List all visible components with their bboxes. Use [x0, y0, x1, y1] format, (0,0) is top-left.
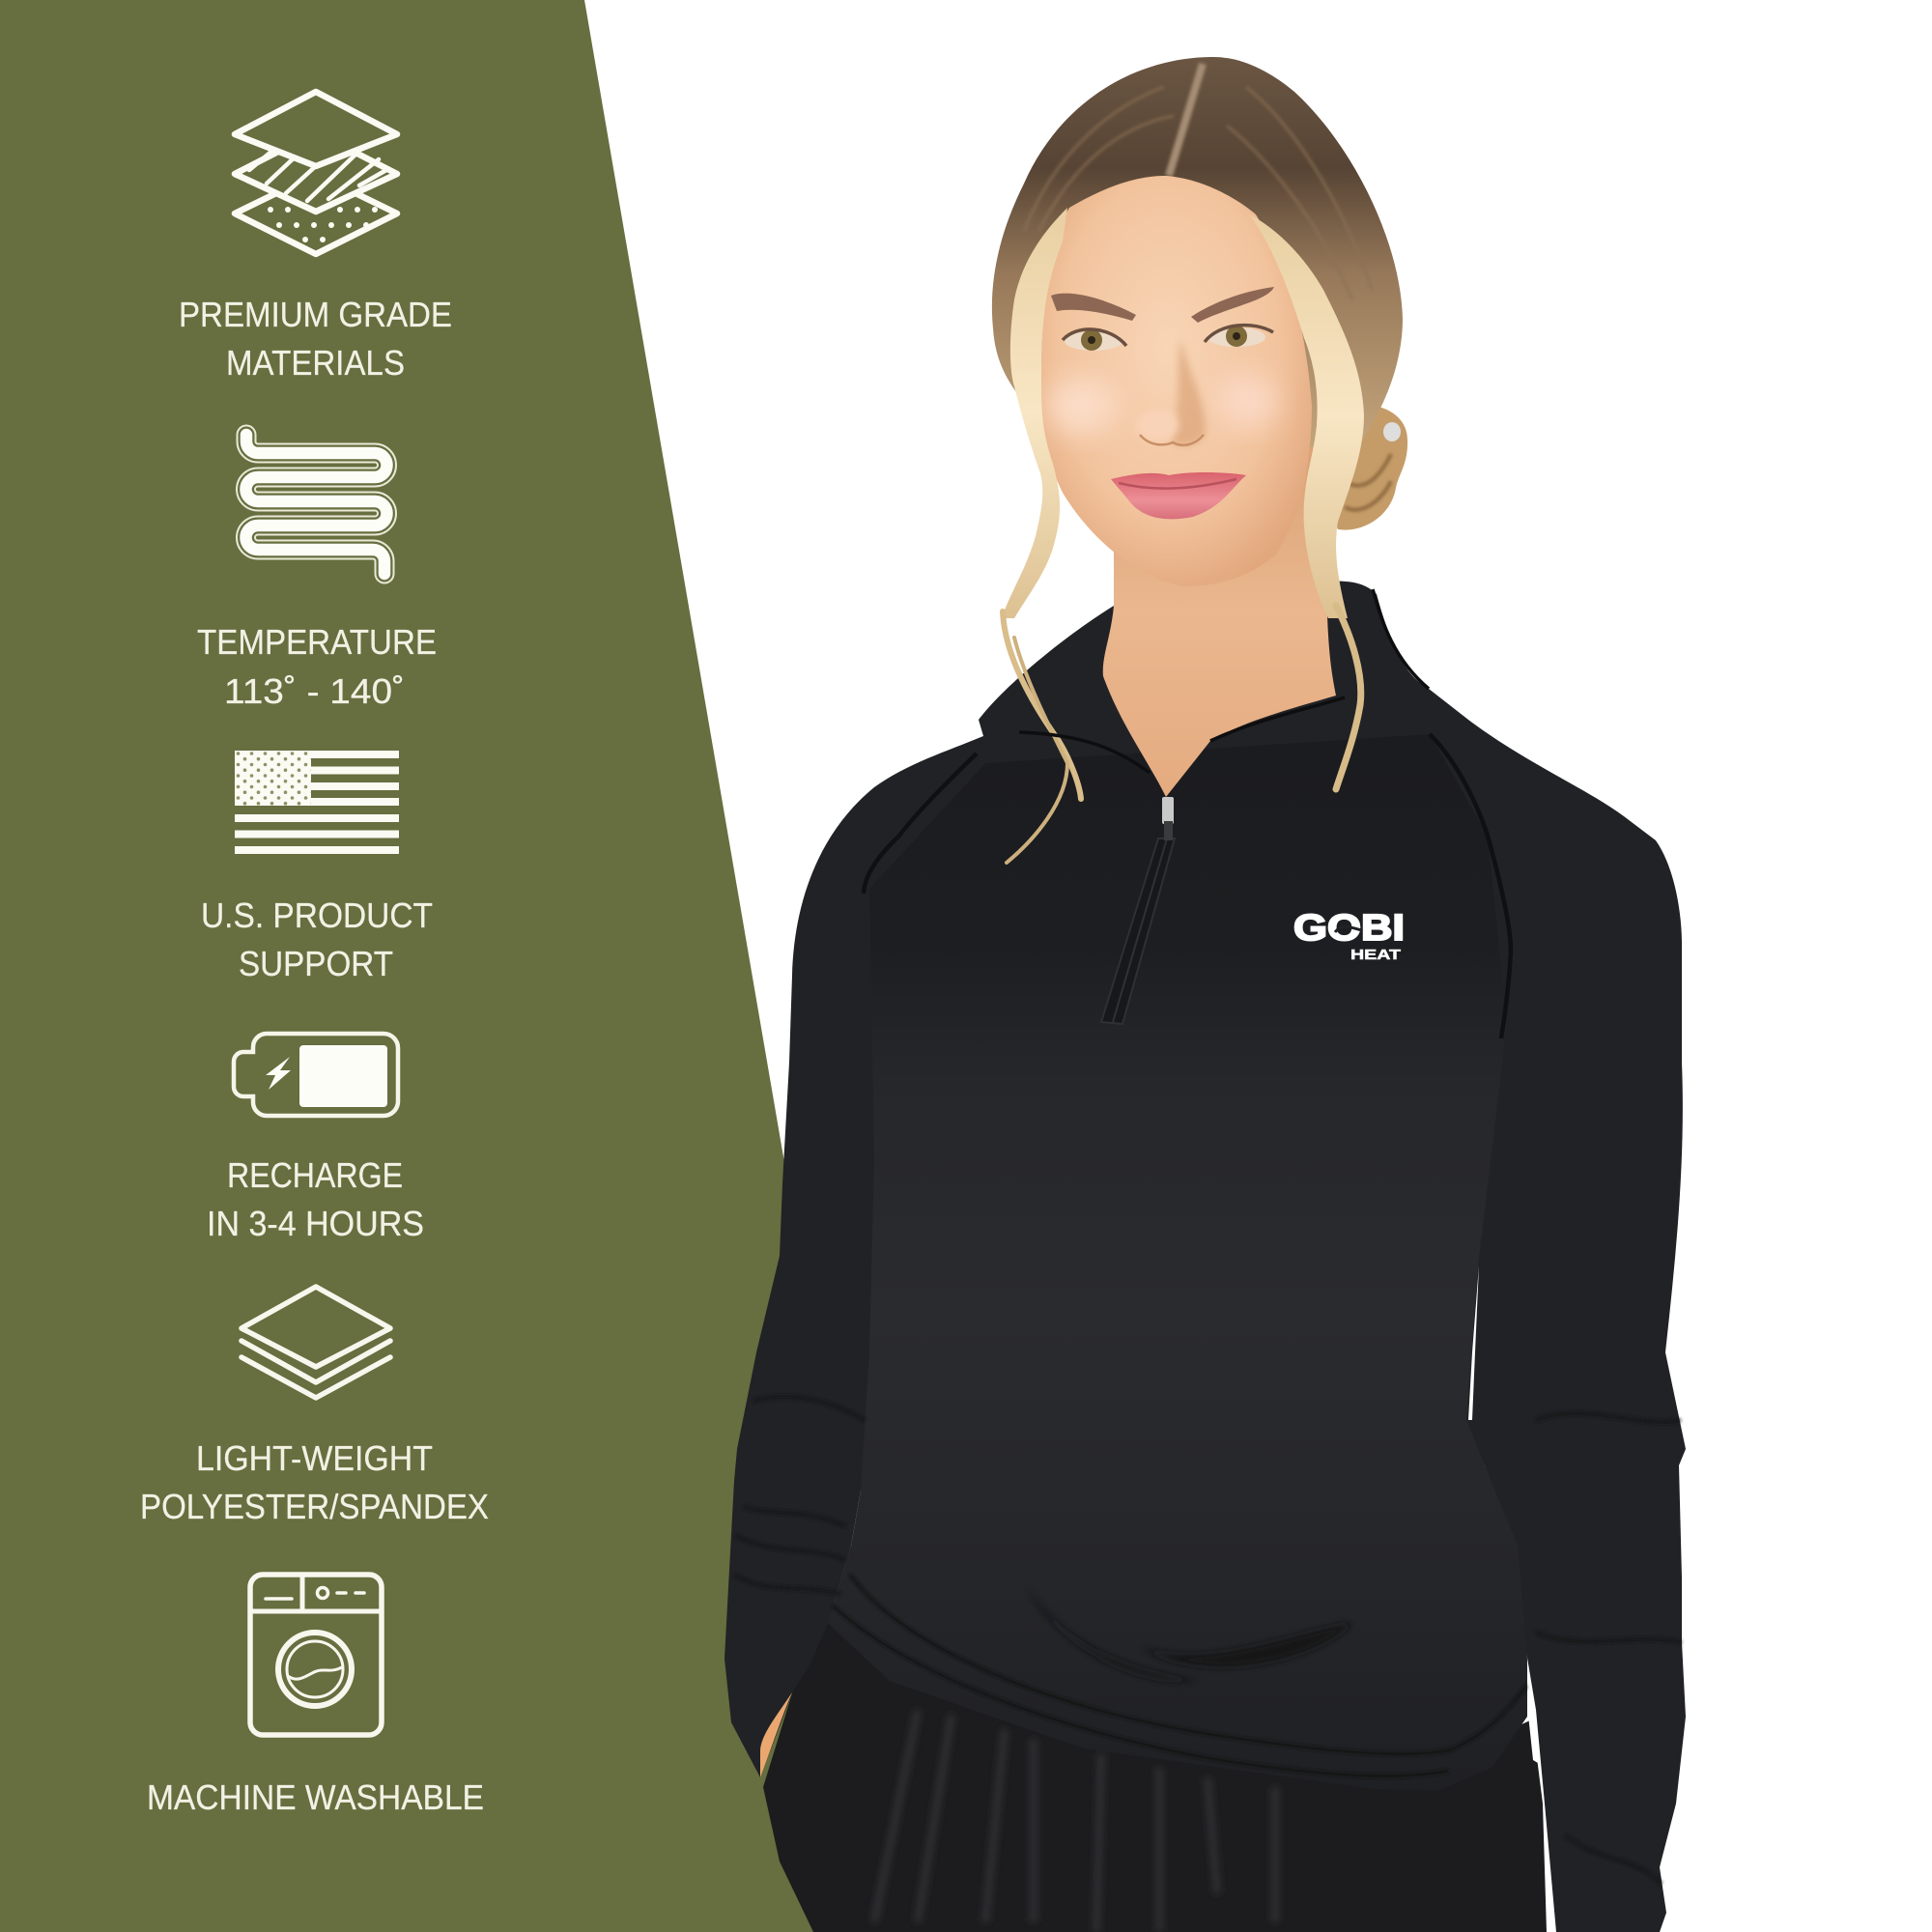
feature: U.S. product support [201, 751, 433, 983]
label: temperature range: 113˚ - 140˚ [224, 671, 405, 711]
label: temperature: TEMPERATURE [197, 622, 437, 662]
facial features [1047, 287, 1277, 519]
icon: American flag [235, 751, 399, 854]
icon: charging battery [234, 1034, 398, 1116]
blonde strands right [1249, 214, 1364, 789]
hair bun [1331, 405, 1407, 530]
label: materials: MATERIALS [226, 343, 405, 383]
photo: woman wearing black quarter-zip heated shirt [724, 57, 1686, 1932]
icon: washing machine [250, 1575, 382, 1735]
icon: stacked fabric sheets [242, 1287, 390, 1398]
clothing: shirt silhouette [724, 582, 1686, 1932]
label: in 3-4 hours: IN 3-4 HOURS [207, 1204, 424, 1243]
logo: Gobi Heat: HEAT [1350, 947, 1401, 963]
white gap between torso and right sleeve [1468, 1265, 1538, 1763]
clothing: pants [763, 1594, 1547, 1932]
icon: material layers [235, 92, 397, 254]
hair part and strands [1024, 64, 1372, 299]
face [1040, 176, 1312, 586]
neck [1103, 425, 1336, 797]
label: support: SUPPORT [239, 944, 393, 983]
icon: heating coil [245, 435, 386, 574]
raglan seams [864, 734, 1511, 1038]
hand in pocket [760, 1692, 792, 1777]
label: light-weight: LIGHT-WEIGHT [196, 1438, 433, 1478]
feature: premium grade materials [179, 92, 452, 383]
label: polyester/spandex: POLYESTER/SPANDEX [140, 1487, 489, 1526]
label: recharge: RECHARGE [227, 1155, 403, 1195]
feature: machine washable [147, 1575, 484, 1817]
feature: temperature [197, 435, 437, 711]
zipper [1101, 797, 1175, 1024]
hair back [992, 57, 1403, 454]
feature: light-weight fabric [140, 1287, 489, 1526]
panel: green feature sidebar [0, 0, 917, 1932]
clothing: shirt torso and hem [828, 734, 1527, 1790]
label: premium grade: PREMIUM GRADE [179, 295, 452, 334]
logo: Gobi Heat: GOBI [1293, 908, 1405, 949]
collar seams [1019, 589, 1429, 773]
label: U.S. product: U.S. PRODUCT [201, 895, 433, 935]
label: machine washable: MACHINE WASHABLE [147, 1777, 484, 1817]
feature: recharge [207, 1034, 424, 1243]
logo: Gobi Heat [1293, 908, 1405, 963]
blonde strands left [1002, 208, 1081, 863]
clothing: sleeve wrinkles [734, 1397, 1682, 1884]
